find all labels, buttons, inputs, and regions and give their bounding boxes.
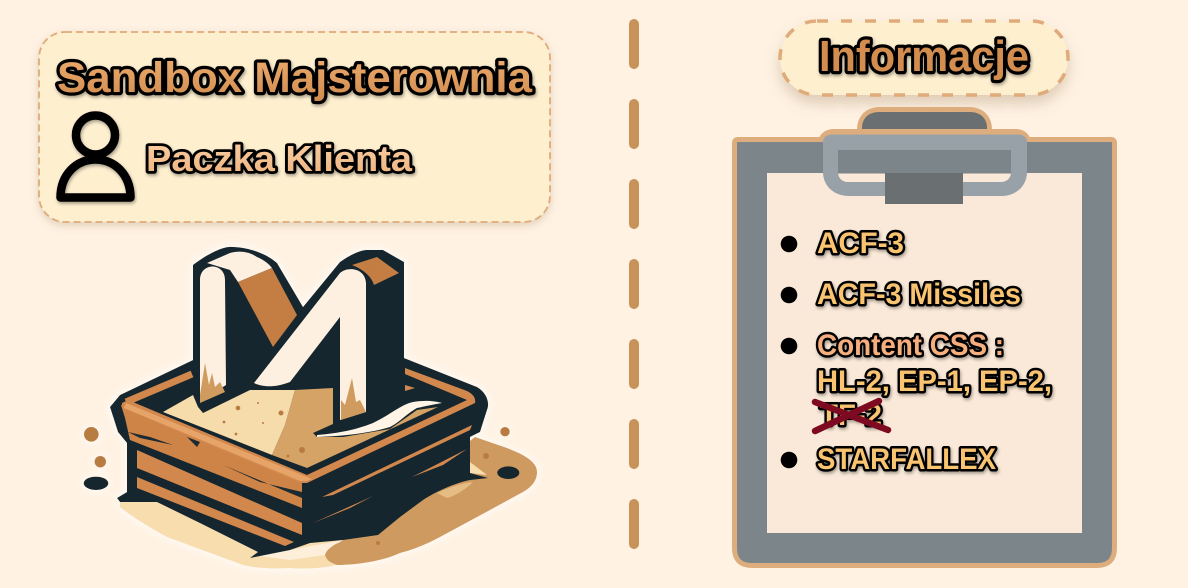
- bullets: [781, 236, 797, 468]
- sand fill tan: [272, 388, 438, 468]
- face tears: [128, 432, 302, 498]
- item: ACF-3 Missiles: ACF-3 Missiles: [817, 278, 1021, 311]
- letter M: [200, 266, 226, 402]
- sand fill light: [163, 390, 295, 455]
- wood stripes: [137, 450, 302, 535]
- tan sand spill: [325, 437, 537, 565]
- box rim front: [122, 368, 475, 483]
- item: Content CSS: Content CSS :: [817, 329, 1004, 362]
- box face: [121, 405, 302, 508]
- heading text: Informacje: [819, 32, 1029, 81]
- clipboard board: [734, 140, 1114, 566]
- box rim left back: [126, 374, 192, 402]
- panel: title card: [39, 32, 550, 222]
- sand specks: [84, 265, 510, 545]
- subheading: Paczka Klienta: Paczka Klienta: [146, 138, 413, 179]
- icon: person: [60, 116, 130, 198]
- vertical dashed divider: [629, 19, 639, 549]
- clipboard clip: [818, 107, 1031, 140]
- sand highlights on spill: [470, 462, 487, 475]
- list: information items: [781, 227, 1052, 476]
- item: ACF-3: ACF-3: [817, 227, 904, 260]
- dark pebbles: [84, 466, 519, 490]
- illustration: sandbox logo: [84, 247, 537, 569]
- clipboard: [734, 107, 1114, 566]
- paper sheet: [767, 173, 1082, 533]
- heading: Sandbox Majsterownia: Sandbox Majsterownia: [57, 54, 533, 102]
- box and letter silhouette: [110, 247, 488, 558]
- item: TF-2 crossed out: TF-2: [820, 399, 882, 432]
- red cross: [815, 401, 888, 431]
- light sand: [120, 498, 345, 569]
- clip ring: [823, 134, 1027, 204]
- heading pill: Informacje: [780, 21, 1068, 95]
- white sand sweep: [317, 401, 442, 437]
- item: STARFALLEX: STARFALLEX: [817, 443, 996, 476]
- item: content list: HL-2, EP-1, EP-2,: [817, 365, 1052, 398]
